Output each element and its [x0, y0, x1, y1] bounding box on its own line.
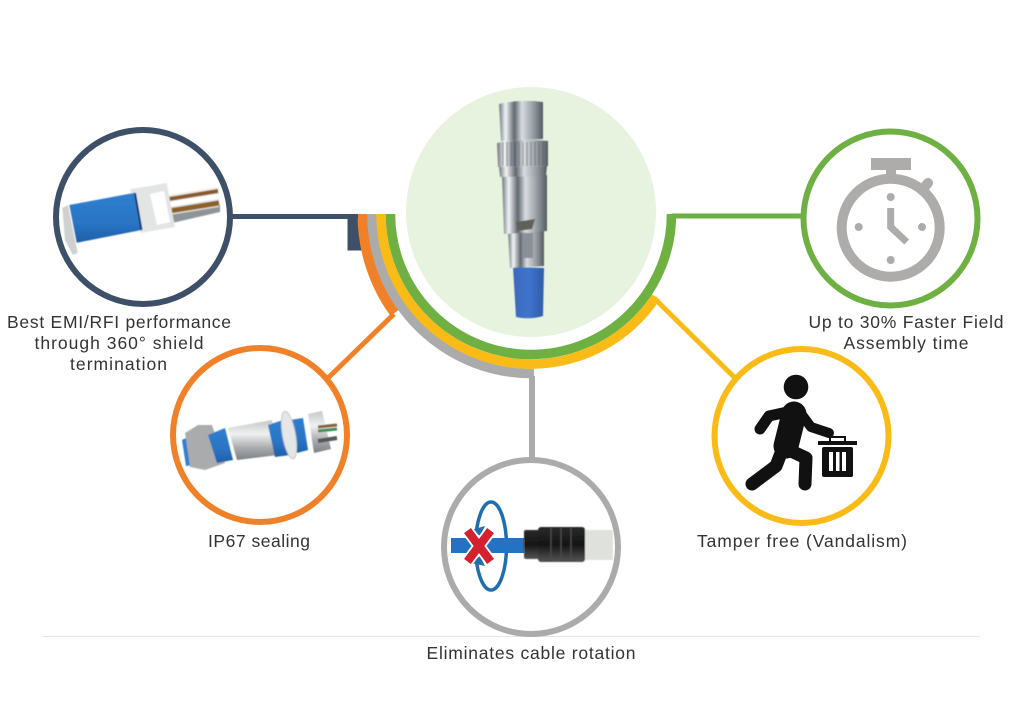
icon: shielded cable [62, 183, 220, 255]
connector lines [230, 216, 804, 460]
connector arcs [362, 214, 672, 374]
panel: cable rotation [444, 460, 618, 634]
panel: shield termination [56, 130, 230, 304]
text: faster assembly: Up to 30% Faster Field [808, 312, 1004, 332]
line: orange [328, 314, 394, 378]
connector photo [497, 101, 548, 318]
text: faster assembly [808, 312, 1004, 353]
line: navy [230, 214, 358, 219]
text: shield termination: termination [70, 354, 167, 374]
icon: molded connector [524, 527, 613, 562]
central product disc [406, 87, 656, 337]
text: faster assembly: Assembly time [844, 333, 968, 353]
icon: person at bin [752, 375, 857, 484]
text: shield termination: Best EMI/RFI performance [7, 312, 231, 332]
text: eliminates rotation: Eliminates cable rotation [426, 643, 636, 663]
divider line [42, 636, 980, 638]
arc: green [390, 214, 672, 354]
icon: rotation arrows [451, 502, 524, 590]
line: gray [529, 376, 535, 460]
line: yellow [654, 298, 735, 378]
navy tab [348, 214, 362, 250]
icon: sealed connector [182, 410, 337, 470]
text: shield termination [7, 312, 231, 374]
text: IP67 sealing: IP67 sealing [208, 531, 310, 551]
panel: IP67 sealing [173, 348, 347, 522]
panel: tamper free [714, 349, 888, 523]
line: green [672, 214, 804, 218]
text: shield termination: through 360° shield [34, 333, 204, 353]
arc: yellow [381, 214, 656, 364]
icon: stopwatch [842, 158, 940, 277]
text: tamper free: Tamper free (Vandalism) [697, 531, 907, 551]
arc: orange [362, 214, 394, 313]
arc: gray [372, 214, 534, 374]
panel: faster assembly [804, 132, 978, 306]
